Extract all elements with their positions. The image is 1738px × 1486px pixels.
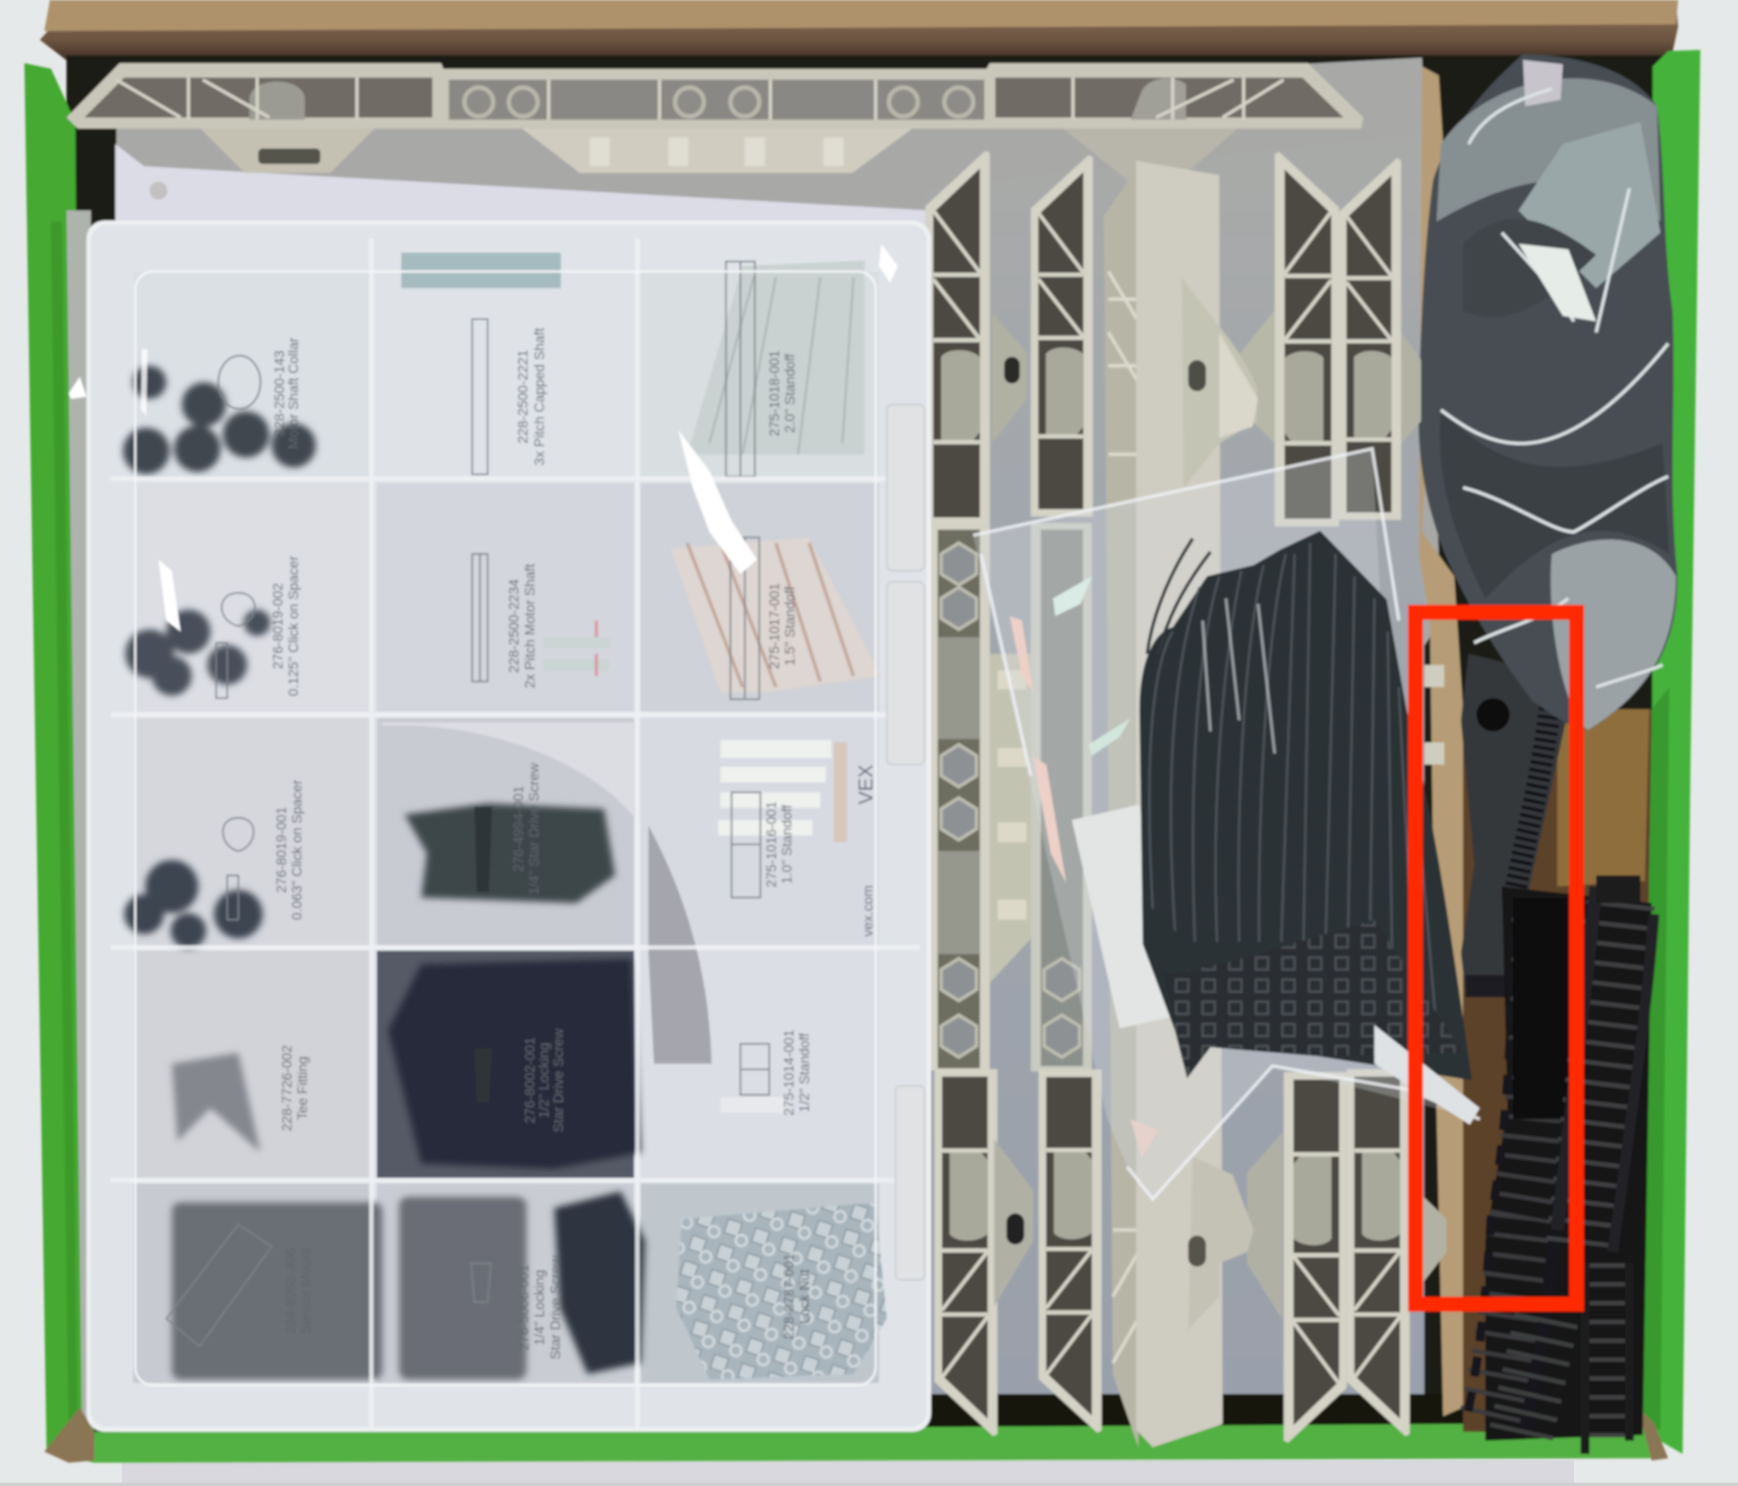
metal sheet (116, 58, 1441, 1398)
tray printed labels: 1/4" Locking (531, 1270, 547, 1345)
tray printed labels: 228-2500-143 (271, 350, 287, 436)
tray printed labels: 0.063" Click on Spacer (288, 779, 304, 920)
long top bracket (67, 63, 1363, 197)
sheet arc shadow (648, 826, 712, 1064)
tray printed labels: Motor Shaft Collar (285, 337, 301, 449)
tray printed labels: 276-8002-001 (521, 1037, 537, 1124)
grid lines (111, 238, 920, 1429)
tray latches (887, 404, 924, 1280)
standoffs (401, 253, 881, 1113)
tray printed labels: Lock Nut (796, 1269, 812, 1324)
rail column right pair (1239, 152, 1446, 1443)
col 2 row 4 screws (388, 959, 641, 1169)
tray printed labels: 3x Pitch Capped Shaft (531, 328, 547, 466)
tray printed labels: 276-5006-001 (516, 1264, 532, 1351)
tray contents (123, 366, 645, 1380)
collars (123, 366, 316, 474)
tray printed labels: 275-1018-001 (766, 350, 782, 436)
red highlight rectangle (1415, 612, 1577, 1304)
rail column second (1031, 155, 1102, 1433)
box interior right (1463, 709, 1652, 1432)
panel backing behind rails (926, 133, 1424, 1398)
tray printed labels: 2x Pitch Motor Shaft (521, 564, 537, 688)
mount plates (172, 1202, 382, 1380)
tray printed labels: 275-1016-001 (763, 801, 779, 887)
bracket gussets (196, 124, 379, 173)
tray printed labels: 0.125" Click on Spacer (285, 556, 301, 696)
chain shadow bed (1485, 887, 1652, 1441)
tray printed labels: VEX (855, 765, 877, 805)
nuts (676, 1202, 887, 1380)
tray printed labels: 1/4" Star Drive Screw (526, 762, 542, 895)
storage tray (69, 221, 931, 1432)
tray printed labels: 275-1014-001 (781, 1029, 797, 1116)
tray printed labels (270, 328, 877, 1360)
left green wall (24, 63, 94, 1463)
right green wall (1640, 50, 1700, 1454)
chain left (1465, 898, 1574, 1435)
tray printed labels: 276-8019-001 (273, 807, 289, 893)
roller chains (1465, 875, 1654, 1454)
tray printed labels: Sensor Mount (297, 1248, 313, 1334)
plastic wrap highlights (69, 244, 898, 632)
tray printed labels: 228-7726-002 (279, 1045, 295, 1131)
chain bottom (1519, 1263, 1629, 1454)
zip tie bundle (1139, 531, 1472, 1080)
clips (125, 609, 270, 696)
tray printed labels: Tee Fitting (294, 1056, 310, 1120)
tee fittings (172, 1053, 260, 1152)
bag with dark parts (1418, 54, 1677, 730)
tray printed labels: 228-2787-001 (781, 1253, 797, 1340)
tray printed labels: 1/2" Locking (536, 1043, 552, 1118)
chain right (1557, 875, 1654, 1252)
black handle tool (1461, 654, 1568, 997)
white sheet behind tray (115, 144, 931, 288)
tray printed labels: 276-4994-001 (510, 785, 526, 872)
tray printed labels: 228-2500-2234 (506, 579, 522, 673)
screws (405, 803, 615, 903)
tray printed labels: 234-8952-306 (282, 1248, 298, 1334)
tray printed labels: Star Drive Screw (547, 1255, 563, 1360)
tray printed labels: 1/2" Standoff (796, 1033, 812, 1112)
rail column left (926, 151, 1033, 1436)
tray printed labels: 276-8019-002 (270, 583, 286, 669)
tray printed labels: vex.com (859, 885, 875, 937)
plastic wrap beside tray (67, 211, 91, 1429)
tray printed labels: 2.0" Standoff (782, 354, 798, 433)
tray printed labels: 1.0" Standoff (778, 805, 794, 884)
tray cell tones (133, 271, 879, 1383)
printed part outlines (166, 262, 769, 1346)
tray printed labels: 228-2500-2221 (515, 349, 531, 444)
bag seams and glare (973, 449, 1480, 1199)
tray printed labels: 1.5" Standoff (782, 586, 798, 666)
bottom green wall (44, 1407, 1668, 1463)
shadow at base of rails (926, 1394, 1646, 1434)
tray printed labels: 275-1017-001 (766, 583, 782, 669)
cardboard top flap (40, 0, 1678, 69)
rail column centre solid (1104, 161, 1258, 1447)
tray printed labels: Star Drive Screw (550, 1028, 566, 1132)
zip tie bag (973, 449, 1480, 1199)
cardboard divider strip (1419, 66, 1463, 1416)
